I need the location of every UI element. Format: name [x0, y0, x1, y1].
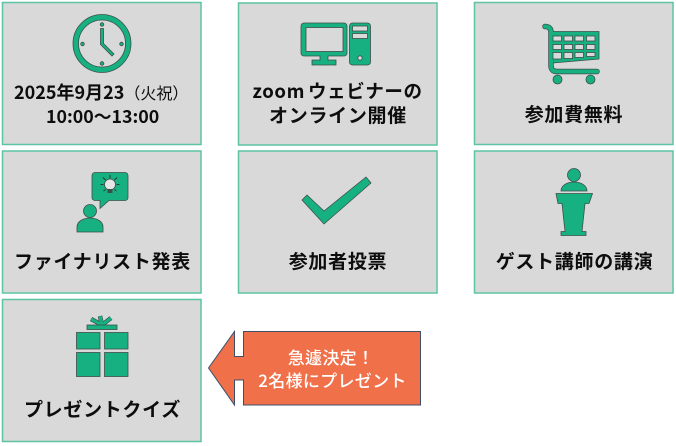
- icon: gift box: [76, 316, 128, 376]
- panel: date and time: [2, 2, 201, 144]
- panel: zoom webinar: [238, 3, 437, 145]
- panel: participant voting: [238, 151, 437, 293]
- text: callout line 1: 急遽決定！: [288, 344, 374, 369]
- callout arrow: prize announcement: [208, 332, 420, 405]
- text: zoom webinar line 1: zoomウェビナーの: [252, 78, 423, 104]
- text: present quiz: プレゼントクイズ: [24, 395, 181, 422]
- text: callout line 2: 2名様にプレゼント: [258, 367, 407, 392]
- text: finalist presentations: ファイナリスト発表: [14, 247, 191, 274]
- panel: guest speaker lecture: [474, 151, 673, 293]
- icon: check mark: [302, 177, 371, 224]
- text: time: 10:00～13:00: [46, 103, 159, 129]
- panel: free participation: [474, 2, 673, 144]
- icon: clock: [73, 14, 131, 72]
- text: guest speaker lecture: ゲスト講師の講演: [496, 247, 653, 274]
- text: participant voting: 参加者投票: [289, 247, 387, 274]
- icon: desktop computer: [301, 23, 370, 65]
- panel: finalist presentations: [2, 151, 201, 293]
- icon: shopping cart: [545, 26, 599, 84]
- text: free participation: 参加費無料: [525, 100, 623, 127]
- text: date: 2025年9月23（火祝）: [14, 79, 188, 105]
- icon: presenter with idea bubble: [77, 172, 128, 232]
- panel: present quiz: [2, 300, 201, 442]
- text: zoom webinar line 2: オンライン開催: [269, 101, 407, 128]
- icon: speaker at podium: [556, 168, 592, 236]
